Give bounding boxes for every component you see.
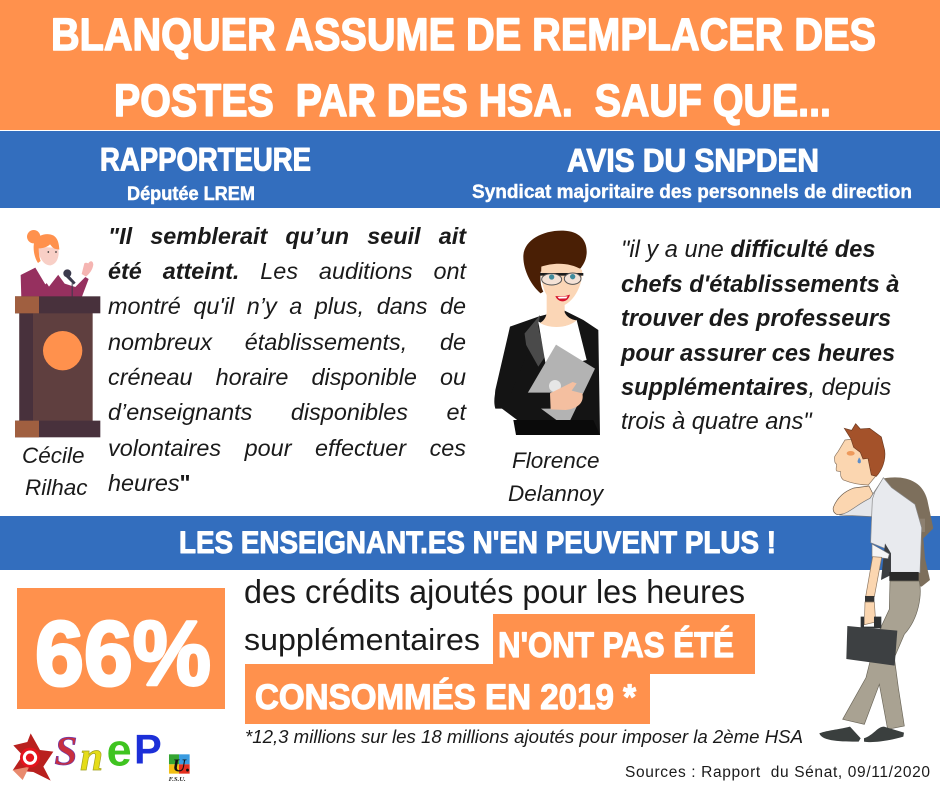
highlight: consommés en 2019: CONSOMMÉS EN 2019 * — [255, 677, 636, 717]
icon: woman with tablet — [494, 231, 600, 435]
logo: SNEP FSU: P — [134, 725, 162, 772]
highlight: n'ont pas été: N'ONT PAS ÉTÉ — [498, 625, 734, 665]
logo: SNEP FSU: n — [80, 734, 103, 780]
logo: SNEP FSU: F.S.U. — [169, 776, 186, 783]
blue band: sources of opinion — [0, 131, 940, 208]
name: Cécile Rilhac: Rilhac — [25, 475, 88, 500]
header banner — [0, 0, 940, 130]
quote: SNPDEN: chefs d'établissements à — [621, 272, 899, 298]
blue band: sources of opinion: Députée LREM — [127, 184, 255, 205]
quote: SNPDEN: supplémentaires, depuis — [621, 375, 891, 401]
highlight: consommés en 2019 — [245, 664, 650, 724]
quote: rapporteure: créneau horaire disponible ou — [108, 364, 466, 390]
quote: SNPDEN — [620, 237, 899, 435]
quote: rapporteure: été atteint. Les auditions ont — [108, 258, 466, 284]
quote: rapporteure: "Il semblerait qu’un seuil ait — [108, 223, 466, 249]
logo: SNEP FSU: e — [107, 725, 132, 776]
sources: Sources : Rapport du Sénat, 09/11/2020 — [625, 764, 930, 781]
header banner: POSTES PAR DES HSA. SAUF QUE... — [114, 75, 831, 126]
crédits text: supplémentaires — [244, 622, 480, 657]
quote: rapporteure: montré qu'il n’y a plus, dans de — [108, 293, 466, 319]
blue band: sources of opinion: RAPPORTEURE — [100, 142, 311, 178]
name: Cécile Rilhac — [22, 443, 88, 500]
logo: SNEP FSU: S — [54, 728, 77, 774]
blue band: teachers: LES ENSEIGNANT.ES N'EN PEUVENT PLUS ! — [179, 524, 776, 560]
name: Cécile Rilhac: Cécile — [22, 443, 85, 468]
logo: SNEP FSU: U. — [173, 756, 190, 776]
name: Florence Delannoy — [508, 448, 604, 506]
quote: SNPDEN: trouver des professeurs — [621, 306, 891, 332]
blue band: teachers — [0, 516, 940, 570]
66% callout: 66% — [35, 603, 211, 705]
quote: rapporteure: nombreux établissements, de — [108, 329, 466, 355]
name: Florence Delannoy: Delannoy — [508, 481, 603, 506]
quote: rapporteure: heures" — [108, 470, 191, 496]
quote: SNPDEN: "il y a une difficulté des — [621, 237, 875, 263]
name: Florence Delannoy: Florence — [512, 448, 600, 473]
quote: rapporteure — [108, 223, 467, 496]
footnote: *12,3 millions sur les 18 millions ajoutés pour imposer la 2ème HSA — [245, 727, 803, 747]
quote: SNPDEN: trois à quatre ans" — [621, 409, 812, 435]
quote: SNPDEN: pour assurer ces heures — [621, 341, 895, 367]
blue band: sources of opinion: Syndicat majoritaire des personnels de direction — [472, 182, 912, 203]
icon: speaker at podium — [15, 230, 100, 437]
quote: rapporteure: d’enseignants disponibles et — [108, 399, 466, 425]
crédits text: des crédits ajoutés pour les heures — [244, 573, 745, 610]
blue band: sources of opinion: AVIS DU SNPDEN — [567, 142, 819, 178]
crédits text — [244, 573, 745, 657]
quote: rapporteure: volontaires pour effectuer ces — [108, 435, 466, 461]
logo: SNEP FSU — [13, 725, 190, 783]
icon: exhausted teacher with briefcase — [819, 424, 933, 742]
highlight: n'ont pas été — [493, 614, 755, 674]
